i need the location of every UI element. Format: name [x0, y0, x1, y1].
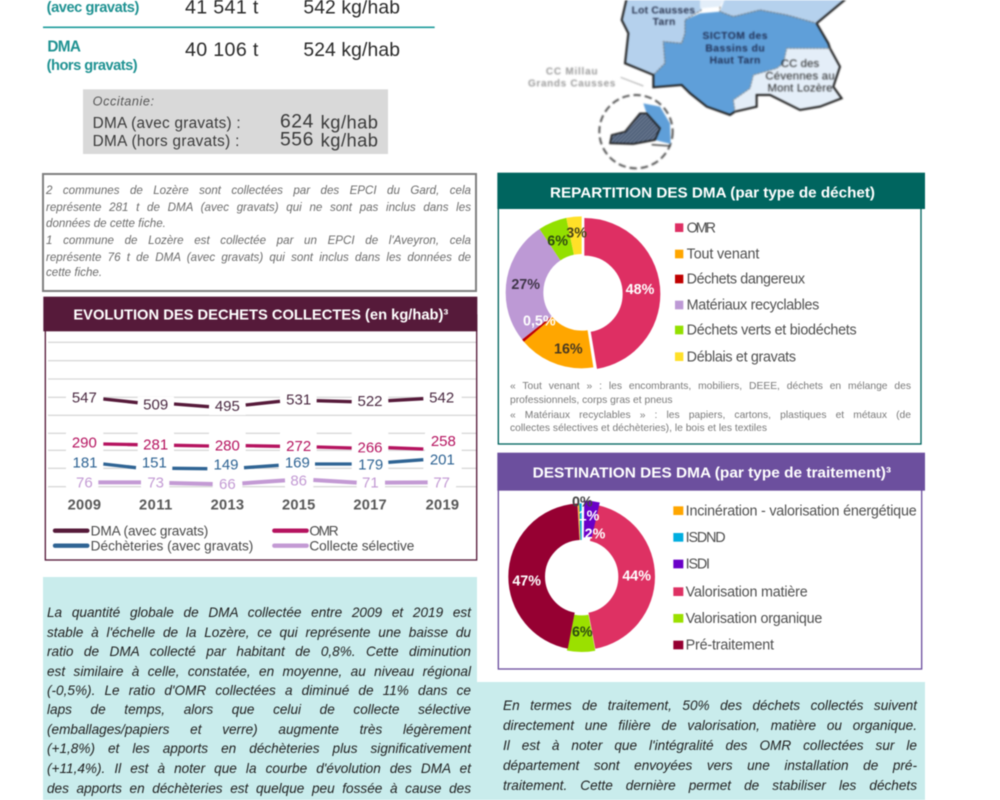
- heading: evolution: EVOLUTION DES DECHETS COLLECTES (en kg/hab)³: [73, 308, 449, 324]
- callout: Occitanie comparison: DMA (hors gravats) :: [93, 133, 239, 150]
- panel: breakdown by waste type: [496, 172, 926, 446]
- callout: Occitanie comparison: kg/hab: [321, 112, 378, 133]
- series: DMA: 509: [143, 396, 168, 413]
- text block: communes note: [42, 173, 477, 292]
- donut: treatment types: 6%: [572, 625, 593, 641]
- text block: evolution commentary: ratio de DMA collecté par habitant de 0,8%. Cette diminution: [47, 644, 471, 659]
- text block: evolution commentary: stable à l'échelle de la Lozère, ce qui représente une baisse du: [47, 625, 471, 640]
- heading: destination: DESTINATION DES DMA (par type de traitement)³: [533, 465, 891, 481]
- legend: treatment types: Incinération - valorisation énergétique: [686, 503, 917, 519]
- row: DMA with rubble: [47, 0, 400, 18]
- donut: treatment types: 0%: [572, 495, 593, 511]
- text block: waste type definitions: « Matériaux recyclables » : les papiers, cartons, plastiques et métaux (de: [510, 410, 911, 421]
- series: déchèteries: 149: [213, 456, 239, 473]
- series: OMR: 266: [357, 440, 383, 457]
- text block: communes note: données de cette fiche.: [46, 217, 166, 230]
- series: OMR: 272: [286, 438, 311, 455]
- heading: destination: [497, 453, 925, 491]
- legend: treatment types: ISDI: [686, 557, 710, 573]
- x axis years: 2015: [282, 497, 315, 513]
- series: déchèteries: 179: [358, 456, 383, 473]
- row: DMA without rubble: DMA: [47, 38, 81, 55]
- legend: treatment types: [673, 503, 917, 654]
- donut: waste types: 27%: [511, 277, 540, 293]
- series: DMA: 522: [357, 393, 383, 410]
- chart legend: OMR: [309, 523, 339, 538]
- text block: treatment commentary: département sont envoyées vers une installation de pré-: [503, 758, 917, 773]
- callout: Occitanie comparison: DMA (avec gravats) :: [93, 115, 241, 132]
- series: OMR: 281: [143, 436, 168, 453]
- text block: treatment commentary: [477, 682, 925, 800]
- x axis years: 2013: [211, 497, 244, 513]
- label: SICTOM: Bassins du: [705, 43, 765, 54]
- chart legend: DMA (avec gravats): [91, 523, 208, 538]
- chart legend: [55, 523, 414, 553]
- text block: evolution commentary: des apports en déchèteries est quelque peu fossée à cause des: [47, 781, 471, 796]
- callout: Occitanie comparison: 624: [280, 111, 314, 132]
- inset: Millau detail: [599, 95, 673, 168]
- series: déchèteries: 201: [430, 451, 455, 468]
- series: collecte sélective: 66: [219, 476, 236, 493]
- series: DMA: [72, 390, 454, 415]
- label: SICTOM: Haut Tarn: [710, 55, 760, 66]
- text block: treatment commentary: directement une filière de valorisation, matière ou organique.: [503, 718, 917, 733]
- label: CC des Cévennes au Mont Lozère: Cévennes au: [765, 70, 835, 82]
- donut: treatment types: 47%: [512, 574, 541, 590]
- series: OMR: [72, 433, 456, 457]
- text block: waste type definitions: [510, 381, 912, 434]
- series: DMA: 531: [286, 391, 311, 408]
- series: DMA: 547: [72, 390, 97, 407]
- series: OMR: 280: [215, 438, 240, 455]
- text block: evolution commentary: laps de temps, alors que celui de collecte sélective: [47, 702, 471, 717]
- x axis years: 2017: [353, 497, 387, 513]
- row: DMA without rubble: (hors gravats): [47, 58, 138, 74]
- text block: treatment commentary: traitement. Cette dernière permet de stabiliser les déchets: [503, 778, 917, 793]
- text block: evolution commentary: La quantité globale de DMA collectée entre 2009 et 2019 est: [47, 605, 471, 620]
- legend: treatment types: Pré-traitement: [686, 638, 774, 654]
- donut: waste types: 48%: [626, 282, 655, 298]
- label: CC des Cévennes au Mont Lozère: [765, 58, 835, 95]
- label: Lot Causses Tarn: [632, 5, 695, 28]
- donut: treatment types: 44%: [622, 569, 651, 585]
- series: déchèteries: 151: [142, 455, 167, 472]
- series: déchèteries: 169: [285, 455, 310, 472]
- text block: communes note: cette fiche.: [46, 266, 102, 279]
- panel: waste evolution line chart: [42, 296, 478, 562]
- series: OMR: 258: [431, 433, 456, 450]
- label: SICTOM: SICTOM des: [702, 31, 768, 42]
- donut: waste types: 16%: [554, 342, 583, 358]
- series: collecte sélective: 71: [362, 474, 379, 491]
- text block: waste type definitions: professionnels, corps gras et pneus: [510, 395, 673, 406]
- series: OMR: 290: [72, 435, 97, 452]
- series: DMA: 495: [215, 398, 240, 415]
- text block: evolution commentary: [43, 577, 477, 800]
- text block: evolution commentary: (+1,8%) et les apports en déchèteries plus significativement: [47, 741, 471, 756]
- chart legend: Déchèteries (avec gravats): [91, 538, 253, 553]
- legend: waste types: Déblais et gravats: [687, 349, 796, 365]
- label: CC Millau Grands Causses: Grands Causses: [528, 79, 616, 90]
- donut: treatment types: [512, 495, 651, 641]
- series: déchèteries: [72, 451, 455, 473]
- x axis years: 2019: [426, 497, 459, 513]
- legend: waste types: Matériaux recyclables: [687, 298, 819, 314]
- text block: evolution commentary: (+11,4%). Il est à noter que la courbe d'évolution des DMA et: [47, 761, 471, 776]
- text block: communes note: représente 281 t de DMA (avec gravats) qui ne sont pas inclus dans les: [46, 201, 471, 214]
- text block: communes note: 1 commune de Lozère est collectée par un EPCI de l'Aveyron, cela: [46, 234, 471, 247]
- text block: communes note: 2 communes de Lozère sont collectées par des EPCI du Gard, cela: [46, 184, 471, 197]
- heading: répartition: REPARTITION DES DMA (par type de déchet): [550, 185, 875, 201]
- label: CC des Cévennes au Mont Lozère: CC des: [781, 58, 819, 70]
- row: DMA without rubble: 40 106 t: [185, 39, 259, 61]
- x axis years: 2011: [139, 497, 172, 513]
- panel: key figures: [42, 0, 436, 154]
- label: Lot Causses Tarn: Lot Causses: [632, 5, 695, 16]
- chart legend: Collecte sélective: [309, 538, 414, 553]
- map: collection territories: [528, 0, 847, 171]
- row: DMA without rubble: 524 kg/hab: [303, 40, 400, 61]
- text block: waste type definitions: « Tout venant » : les encombrants, mobiliers, DEEE, déchets en mélange des: [510, 381, 911, 392]
- text block: communes note: représente 76 t de DMA (avec gravats) qui sont inclus dans les données de: [46, 251, 471, 264]
- callout: Occitanie comparison: kg/hab: [321, 130, 378, 151]
- callout: Occitanie comparison: [83, 89, 388, 154]
- legend: treatment types: ISDND: [686, 530, 726, 546]
- row: DMA with rubble: (avec gravats): [47, 0, 139, 16]
- x axis years: [68, 497, 459, 513]
- text block: evolution commentary: est similaire à celle, constatée, en moyenne, au niveau régional: [47, 664, 471, 679]
- series: collecte sélective: 76: [76, 474, 93, 491]
- label: CC Millau Grands Causses: [528, 66, 616, 90]
- legend: waste types: Déchets dangereux: [687, 272, 806, 288]
- legend: waste types: [675, 220, 857, 365]
- text block: waste type definitions: collectes sélectives et déchèteries), le bois et les textiles: [510, 423, 767, 434]
- series: collecte sélective: [76, 473, 450, 493]
- label: CC Millau Grands Causses: CC Millau: [546, 66, 598, 77]
- series: DMA: 542: [429, 390, 454, 407]
- panel: destination by treatment: [496, 452, 926, 670]
- donut: treatment types: 2%: [585, 526, 606, 542]
- series: collecte sélective: 73: [147, 474, 164, 491]
- donut: waste types: 3%: [566, 225, 587, 241]
- x axis years: 2009: [68, 497, 101, 513]
- donut: treatment types: 1%: [579, 509, 600, 525]
- text block: treatment commentary: En termes de traitement, 50% des déchets collectés suivent: [503, 698, 917, 713]
- label: CC des Cévennes au Mont Lozère: Mont Lozère: [768, 83, 832, 95]
- label: SICTOM: [702, 31, 768, 66]
- callout: Occitanie comparison: 556: [280, 129, 313, 150]
- heading: répartition: [497, 173, 925, 209]
- series: collecte sélective: 77: [433, 474, 450, 491]
- legend: treatment types: Valorisation organique: [686, 611, 822, 627]
- row: DMA without rubble: [47, 38, 400, 74]
- text block: evolution commentary: (emballages/papiers et verre) augmente très légèrement: [47, 722, 471, 737]
- heading: evolution: [43, 297, 477, 331]
- legend: treatment types: Valorisation matière: [686, 584, 808, 600]
- text block: evolution commentary: (-0,5%). Le ratio d'OMR collectées a diminué de 11% dans ce: [47, 683, 471, 698]
- legend: waste types: Déchets verts et biodéchets: [687, 323, 857, 339]
- series: déchèteries: 181: [72, 455, 98, 472]
- legend: waste types: OMR: [687, 220, 716, 236]
- text block: treatment commentary: Il est à noter que l'intégralité des OMR collectées sur le: [503, 738, 917, 753]
- series: collecte sélective: 86: [290, 473, 307, 490]
- callout: Occitanie comparison: Occitanie:: [93, 94, 154, 108]
- donut: waste types: 0,5%: [523, 314, 556, 330]
- legend: waste types: Tout venant: [687, 247, 759, 263]
- label: Lot Causses Tarn: Tarn: [653, 17, 675, 28]
- donut: waste types: 6%: [547, 234, 568, 250]
- donut: waste types: [511, 225, 655, 358]
